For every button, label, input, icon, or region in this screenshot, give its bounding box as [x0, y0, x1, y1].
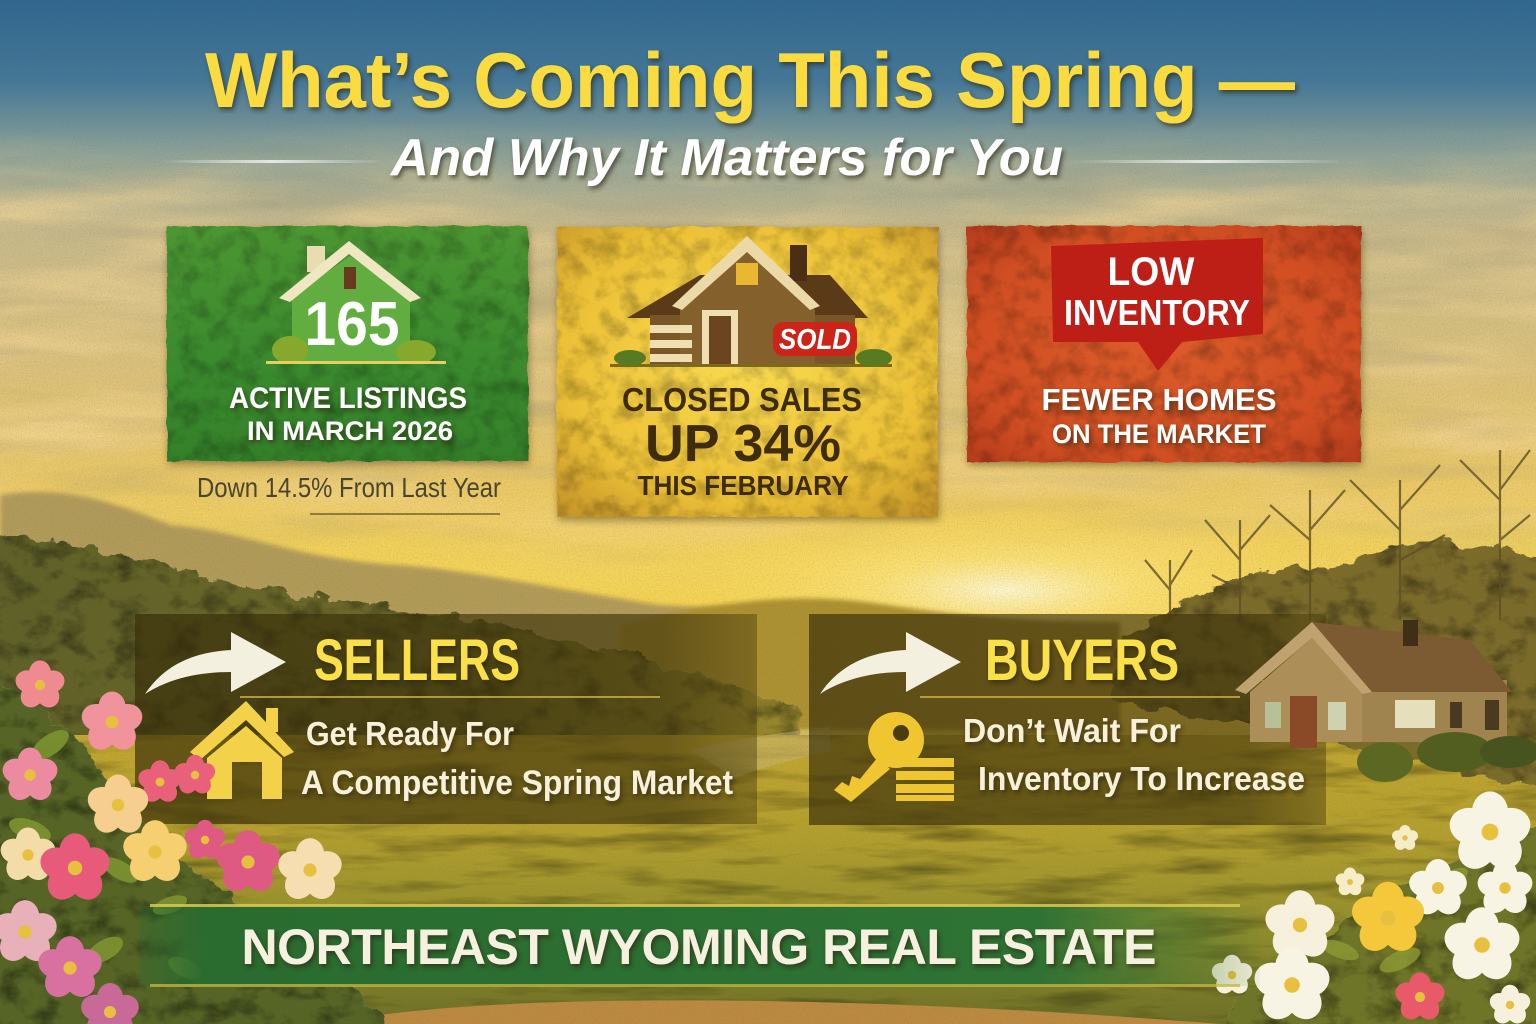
callout: low inventory [1051, 238, 1263, 371]
title: What’s Coming This Spring — [205, 36, 1295, 124]
label: fewer homes: FEWER HOMES [1042, 382, 1276, 417]
icon: green house [266, 241, 446, 364]
panel: buyers [809, 614, 1326, 825]
text: buyers message [963, 712, 1305, 797]
background: forested hills [0, 530, 800, 800]
label: closed sales: THIS FEBRUARY [638, 470, 849, 501]
background: river [690, 726, 830, 778]
background: trees on right [1110, 450, 1536, 790]
label: fewer homes [1042, 382, 1276, 449]
flowers: right cluster [1209, 791, 1536, 1024]
panel: sellers [135, 614, 757, 824]
background: sky and clouds [0, 0, 1536, 735]
text: buyers message: Inventory To Increase [978, 760, 1305, 797]
background: farmhouse [1235, 620, 1536, 782]
text: sellers message: Get Ready For [306, 715, 514, 752]
subtitle [160, 129, 1345, 187]
subtitle: And Why It Matters for You [389, 129, 1063, 187]
icon: arrow [820, 632, 961, 694]
icon: sold brown house [610, 236, 892, 367]
label: active listings [229, 382, 467, 446]
panel: low inventory [967, 226, 1362, 465]
note: down from last year: Down 14.5% From Last Year [197, 472, 501, 503]
background: dirt path [330, 1000, 1220, 1024]
badge: sold: SOLD [779, 324, 851, 356]
label: fewer homes: ON THE MARKET [1052, 419, 1266, 449]
background: distant mountains [0, 492, 1120, 730]
footer banner [140, 904, 1260, 987]
panel: active listings [167, 226, 529, 464]
footer banner: NORTHEAST WYOMING REAL ESTATE [242, 919, 1156, 975]
icon: yellow house [190, 701, 294, 799]
text: buyers message: Don’t Wait For [963, 712, 1181, 749]
label: closed sales: CLOSED SALES [622, 381, 862, 418]
label: active listings: ACTIVE LISTINGS [229, 382, 467, 415]
heading: sellers: SELLERS [314, 628, 520, 693]
label: closed sales: UP 34% [645, 415, 841, 473]
stat: 165: 165 [304, 290, 400, 359]
callout: low inventory: INVENTORY [1064, 292, 1250, 333]
heading: buyers: BUYERS [985, 628, 1179, 693]
callout: low inventory: LOW [1108, 250, 1195, 294]
label: active listings: IN MARCH 2026 [247, 416, 453, 446]
text: sellers message: A Competitive Spring Market [301, 764, 733, 802]
flowers: left cluster [0, 660, 400, 1024]
icon: key and coins [834, 712, 954, 802]
panel: closed sales [557, 227, 939, 520]
text: sellers message [301, 715, 733, 802]
icon: arrow [145, 632, 286, 694]
background: meadow [0, 735, 1536, 1024]
label: closed sales [622, 381, 862, 501]
